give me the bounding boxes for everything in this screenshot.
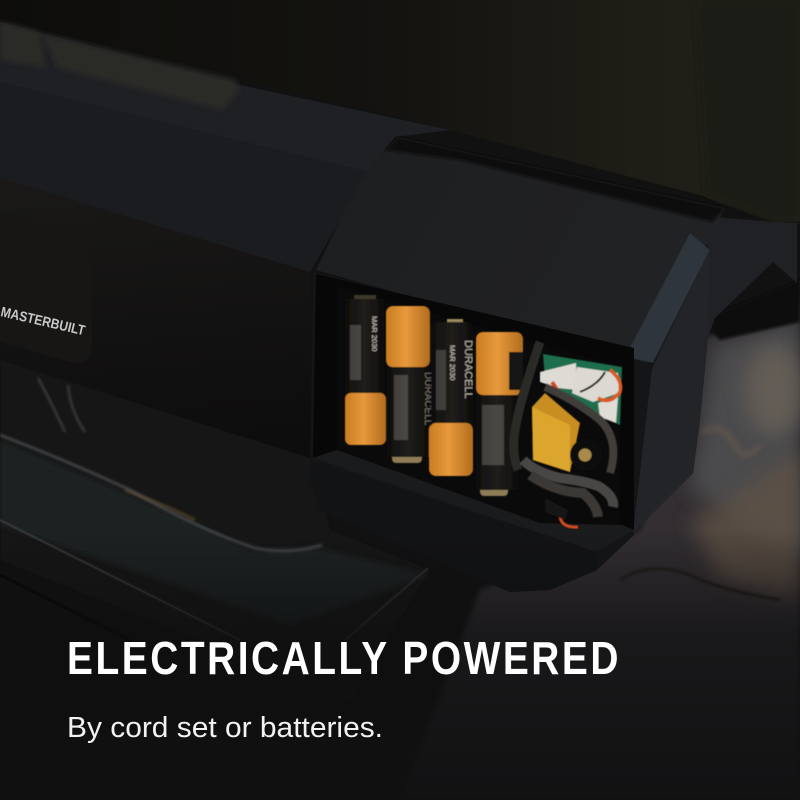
lower cable bundle <box>523 460 613 507</box>
battery housing <box>310 137 725 592</box>
compartment cavity <box>313 274 634 550</box>
battery 4 <box>476 332 523 496</box>
battery 1: MAR 2030 <box>370 316 379 351</box>
bottom gradient overlay <box>0 530 800 800</box>
name badge <box>0 212 92 363</box>
circuit board <box>543 354 622 425</box>
battery 3: MAR 2030 <box>448 345 457 380</box>
right floor <box>400 300 800 800</box>
black gap under bracket <box>700 280 800 340</box>
subtitle: By cord set or batteries. <box>67 712 383 744</box>
terminal <box>570 439 602 471</box>
highlight strip <box>625 233 710 363</box>
grey ledge <box>0 22 450 172</box>
red wires <box>598 370 621 400</box>
battery 2: DURACELL <box>422 372 433 426</box>
rail upper face <box>0 82 368 272</box>
right cable <box>545 387 613 473</box>
battery 2 <box>386 306 433 463</box>
batteries <box>345 295 523 496</box>
machine body rail <box>0 82 368 460</box>
yellow relay <box>532 393 580 472</box>
left floor <box>0 350 430 700</box>
battery 3 <box>429 319 474 476</box>
upper cooker band <box>0 0 800 222</box>
battery 1 <box>345 295 386 445</box>
right bracket <box>633 215 797 533</box>
title: ELECTRICALLY POWERED <box>67 632 621 684</box>
white connectors <box>540 363 577 390</box>
lower lip <box>313 450 634 552</box>
battery 3: DURACELL <box>462 340 474 399</box>
name badge: MASTERBUILT <box>0 303 87 338</box>
electronics <box>514 342 622 527</box>
housing top face <box>316 137 725 357</box>
handle recess <box>42 34 240 110</box>
rail lower face <box>0 178 316 460</box>
left cable <box>514 342 540 470</box>
housing lower shell <box>310 272 655 592</box>
side wall <box>633 250 710 533</box>
rounded corner block <box>695 0 800 222</box>
